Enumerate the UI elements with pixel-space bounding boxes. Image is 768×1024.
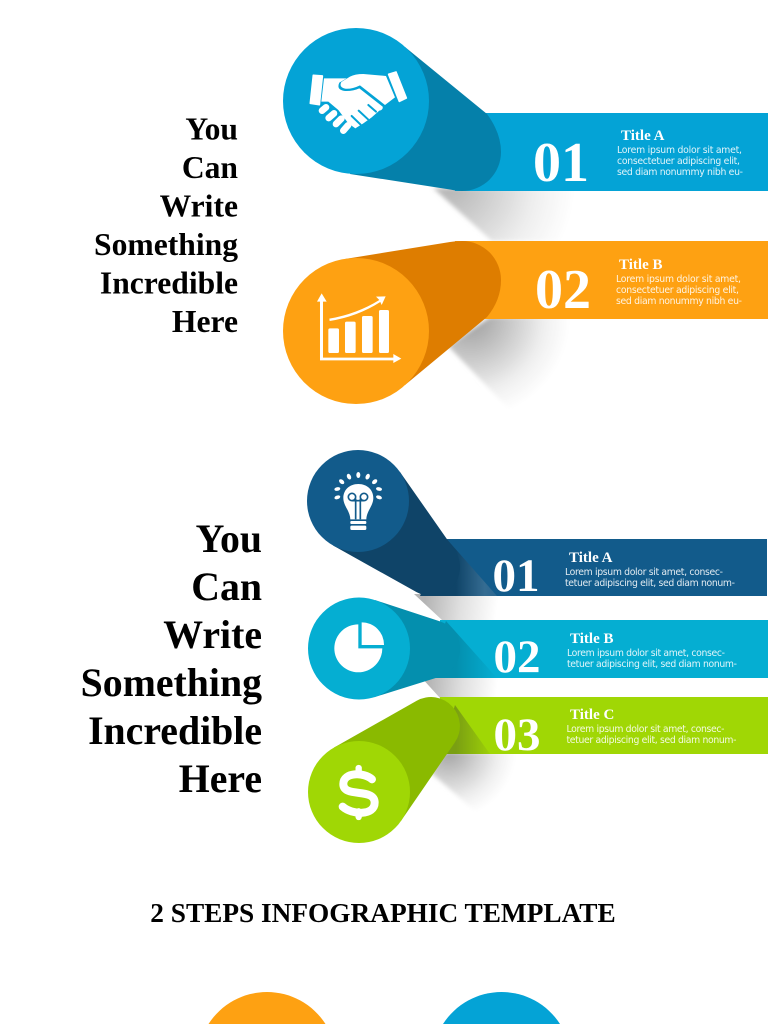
icon: handshake (310, 72, 406, 131)
number 01: 01 (492, 550, 540, 602)
text: Title B (567, 631, 737, 670)
icon: growth chart (317, 293, 401, 363)
panel: step 02 orange ribbon (283, 241, 768, 412)
text: Title A: Title A (621, 128, 665, 144)
text: Title A: sed diam nonummy nibh eu- (617, 167, 743, 178)
left text: second block: Can (191, 565, 262, 609)
panel: step 01 navy ribbon (307, 450, 767, 620)
text: Title B: Title B (619, 257, 662, 273)
text: Title C: tetuer adipiscing elit, sed diam nonum- (566, 735, 736, 746)
text: Title C: Title C (570, 707, 614, 723)
left text: first block: Something (94, 227, 238, 262)
left text: second block: Something (81, 661, 262, 705)
text: Title A: tetuer adipiscing elit, sed diam nonum- (565, 578, 735, 589)
number 03: 03 (494, 709, 540, 761)
number 02: 02 (535, 259, 591, 321)
heading: 2 steps template: 2 STEPS INFOGRAPHIC TEMPLATE (150, 898, 616, 928)
left text: first block: Here (172, 304, 238, 339)
icon: dollar sign (343, 768, 375, 817)
number 01: 01 (533, 132, 589, 194)
text: Title B (616, 257, 742, 307)
left text: first block: You (185, 112, 238, 146)
left text: second block: You (196, 517, 262, 561)
panel: step 01 blue ribbon (283, 28, 768, 241)
text: Title A: Lorem ipsum dolor sit amet, consec- (565, 567, 723, 578)
left text: second block: Incredible (88, 709, 262, 753)
panel: step 03 green ribbon (308, 697, 768, 843)
left text: first block: Can (182, 150, 238, 185)
text: Title B: consectetuer adipiscing elit, (616, 285, 739, 296)
left text: first block: Write (160, 188, 238, 224)
text: Title C: Lorem ipsum dolor sit amet, consec- (566, 724, 724, 735)
text: Title B: tetuer adipiscing elit, sed diam nonum- (567, 659, 737, 670)
text: Title A (565, 550, 735, 589)
left text: second block: Here (179, 757, 262, 801)
number 02: 02 (494, 631, 540, 683)
text: Title B: sed diam nonummy nibh eu- (616, 296, 742, 307)
orange step circle, cropped (208, 992, 326, 1024)
text: Title A: consectetuer adipiscing elit, (617, 156, 740, 167)
panel: step 02 teal ribbon (308, 598, 768, 700)
left text: second block: Write (163, 613, 262, 657)
text: Title A: Lorem ipsum dolor sit amet, (617, 145, 742, 156)
icon: light bulb (334, 472, 382, 530)
text: Title A: Title A (569, 550, 613, 566)
text: Title B: Lorem ipsum dolor sit amet, consec- (567, 648, 725, 659)
text: Title A (617, 128, 743, 178)
blue step circle, cropped (443, 992, 560, 1024)
left text: first block: Incredible (100, 266, 238, 300)
text: Title C (566, 707, 736, 746)
text: Title B: Lorem ipsum dolor sit amet, (616, 274, 741, 285)
icon: pie chart (334, 622, 384, 672)
text: Title B: Title B (570, 631, 613, 647)
